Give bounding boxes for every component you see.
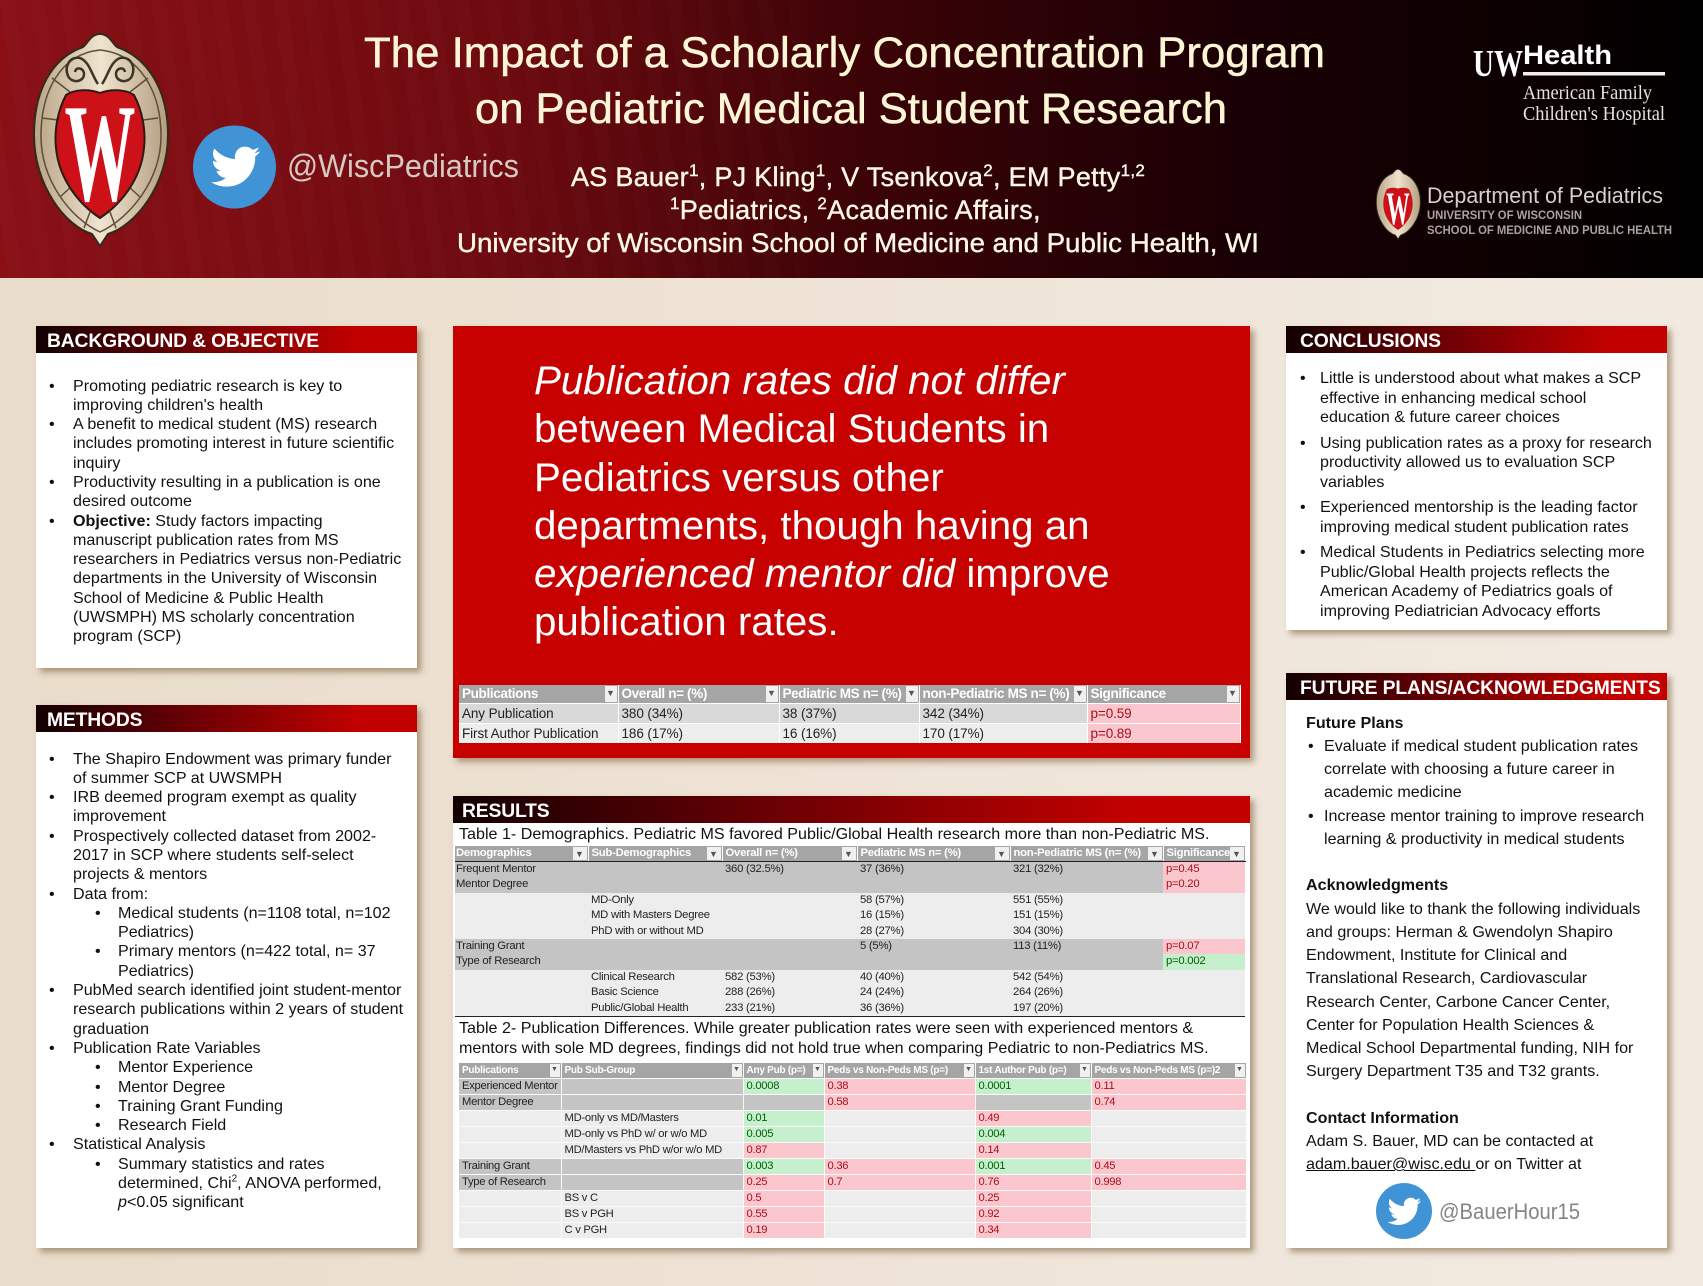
table 2: publication differences: 0.14 (978, 1144, 999, 1156)
heading: results: RESULTS (462, 801, 550, 822)
table 1: demographics: PhD with or without MD (591, 925, 704, 937)
text block: methods bullets: • (95, 1078, 101, 1096)
table 1: demographics: ▼ (709, 849, 718, 859)
key finding statement: between Medical Students in (534, 406, 1049, 451)
table 2: publication differences: 0.74 (1094, 1096, 1115, 1108)
table 1: demographics: 5 (5%) (860, 940, 892, 952)
text block: methods bullets: IRB deemed program exempt as quality (73, 788, 357, 806)
text block: background bullets: • (49, 512, 55, 530)
text block: conclusions bullets: productivity allowed us to evaluation SCP (1320, 453, 1615, 471)
table 2: publication differences: 0.005 (746, 1128, 773, 1140)
table 2: publication differences: 0.87 (746, 1144, 767, 1156)
heading: methods (36, 705, 417, 732)
table 1: demographics: MD-Only (591, 894, 634, 906)
table 1: demographics: 321 (32%) (1013, 863, 1063, 875)
caption: table 2: mentors with sole MD degrees, findings did not hold true when comparing Pediatric to non-Pediatrics MS. (459, 1038, 1209, 1056)
table 2: publication differences: Pub Sub-Group (564, 1065, 635, 1076)
title: The Impact of a Scholarly Concentration Program (364, 29, 1325, 77)
twitter handle: @WiscPediatrics (287, 148, 519, 184)
text block: methods bullets: The Shapiro Endowment was primary funder (73, 750, 391, 768)
heading: background and objective: BACKGROUND & OBJECTIVE (47, 331, 319, 352)
key finding statement: Pediatrics versus other (534, 455, 944, 500)
text block: background bullets: manuscript publication rates from MS (73, 531, 339, 549)
table 1: demographics: 582 (53%) (725, 971, 775, 983)
text block: future plans, acknowledgments, contact: Research Center, Carbone Cancer Center, (1306, 992, 1610, 1010)
heading: future plans and acknowledgments: FUTURE PLANS/ACKNOWLEDGMENTS (1300, 678, 1661, 699)
text block: future plans, acknowledgments, contact: Center for Population Health Sciences & (1306, 1016, 1594, 1034)
table 1: demographics: 58 (57%) (860, 894, 904, 906)
table 1: demographics: 24 (24%) (860, 986, 904, 998)
panel: methods (36, 705, 417, 1248)
key finding statement: publication rates. (534, 599, 839, 644)
table 1: demographics: Type of Research (456, 955, 541, 967)
table 1: demographics: 551 (55%) (1013, 894, 1063, 906)
table 2: publication differences: Peds vs Non-Peds MS (p=)2 (1094, 1065, 1220, 1076)
panel: key finding (453, 326, 1250, 758)
table 2: publication differences: 0.36 (828, 1160, 848, 1172)
table 2: publication differences: 0.7 (828, 1176, 842, 1188)
authors and affiliations: 1 (670, 194, 680, 213)
text block: future plans, acknowledgments, contact: Adam S. Bauer, MD can be contacted at (1306, 1132, 1593, 1150)
logo: UW Health American Family Children's Hospital: American Family (1523, 82, 1652, 104)
table 2: publication differences: ▼ (814, 1066, 821, 1073)
table 2: publication differences: 0.58 (828, 1096, 848, 1108)
table 2: publication differences: 0.01 (746, 1112, 767, 1124)
text block: background bullets: Promoting pediatric research is key to (73, 376, 342, 394)
text block: future plans, acknowledgments, contact (1306, 714, 1644, 1173)
text block: methods bullets: Prospectively collected dataset from 2002- (73, 827, 376, 845)
authors and affiliations: 2 (817, 194, 827, 213)
table 2: publication differences: ▼ (965, 1066, 972, 1073)
header banner (0, 0, 1703, 278)
text block: methods bullets: • (95, 1097, 101, 1115)
table 2: publication differences: 0.001 (978, 1160, 1005, 1172)
table: publication rates summary: ▼ (1075, 688, 1084, 698)
table 2: publication differences: 0.25 (746, 1176, 767, 1188)
panel: background and objective (36, 326, 417, 668)
table 1: demographics: Pediatric MS n= (%) (860, 847, 961, 859)
table 1: demographics: 233 (21%) (725, 1002, 775, 1014)
twitter badge: BauerHour15 (1376, 1183, 1580, 1239)
text block: future plans, acknowledgments, contact: correlate with choosing a future career in (1324, 760, 1615, 778)
table 1: demographics: 16 (15%) (860, 909, 904, 921)
table 2: publication differences: ▼ (1236, 1066, 1243, 1073)
text block: future plans, acknowledgments, contact: Future Plans (1306, 714, 1403, 732)
table 1: demographics: Demographics (456, 847, 531, 859)
table: publication rates summary: Any Publication (462, 706, 554, 720)
logo: university crest (34, 34, 168, 246)
text block: methods bullets: Mentor Experience (118, 1058, 253, 1076)
table: publication rates summary: Pediatric MS n= (%) (782, 686, 902, 700)
table 2: publication differences: MD/Masters vs PhD w/or w/o MD (564, 1144, 722, 1156)
text block: methods bullets: Data from: (73, 885, 148, 903)
text block: future plans, acknowledgments, contact: Evaluate if medical student publication rates (1324, 737, 1638, 755)
table 1: demographics: Significance (1166, 847, 1230, 859)
table 1: demographics: 360 (32.5%) (725, 863, 784, 875)
table 2: publication differences: 0.003 (746, 1160, 773, 1172)
table 1: demographics: non-Pediatric MS (n= (%) (1014, 847, 1141, 859)
text block: methods bullets: • (95, 1155, 101, 1173)
text block: conclusions bullets (1300, 369, 1652, 620)
authors and affiliations: Pediatrics, (680, 195, 817, 225)
table 1: demographics: MD with Masters Degree (591, 909, 710, 921)
table 1: demographics: 288 (26%) (725, 986, 775, 998)
table 1: demographics: ▼ (1150, 849, 1159, 859)
text block: future plans, acknowledgments, contact: • (1308, 737, 1314, 755)
table: publication rates summary: Publications (462, 686, 538, 700)
table 2: publication differences (459, 1063, 1246, 1238)
text block: methods bullets: Pediatrics) (118, 923, 194, 941)
text block: conclusions bullets: education & future career choices (1320, 408, 1560, 426)
heading: conclusions: CONCLUSIONS (1300, 331, 1441, 352)
authors and affiliations: , PJ Kling (699, 162, 816, 192)
table: publication rates summary: Overall n= (%) (622, 686, 707, 700)
text block: background bullets: Objective: Study factors impacting (73, 512, 323, 530)
table 1: demographics: Overall n= (%) (726, 847, 798, 859)
text block: methods bullets (49, 750, 403, 1211)
table 2: publication differences: 0.45 (1094, 1160, 1115, 1172)
authors and affiliations: , V Tsenkova (826, 162, 984, 192)
table 1: demographics: 36 (36%) (860, 1002, 904, 1014)
logo: UW Health American Family Children's Hospital: Health (1523, 40, 1612, 70)
text block: background bullets (49, 376, 401, 645)
authors and affiliations: AS Bauer (571, 162, 689, 192)
logo: Department of Pediatrics: SCHOOL OF MEDICINE AND PUBLIC HEALTH (1427, 225, 1672, 237)
text block: methods bullets: determined, Chi2, ANOVA performed, (118, 1174, 382, 1192)
table 2: publication differences: Training Grant (462, 1160, 530, 1172)
heading: methods: METHODS (47, 710, 142, 731)
text block: background bullets: includes promoting interest in future scientific (73, 434, 394, 452)
logo: Department of Pediatrics (1376, 169, 1672, 239)
table 2: publication differences: BS v PGH (564, 1208, 613, 1220)
table 1: demographics: 197 (20%) (1013, 1002, 1063, 1014)
authors and affiliations: 2 (983, 161, 993, 180)
text block: future plans, acknowledgments, contact: academic medicine (1324, 783, 1462, 801)
text block: methods bullets: • (49, 750, 55, 768)
text block: background bullets: (UWSMPH) MS scholarly concentration (73, 608, 355, 626)
text block: methods bullets: • (49, 1039, 55, 1057)
table: publication rates summary: 186 (17%) (622, 726, 683, 740)
logo: university crest: W (64, 76, 136, 231)
text block: methods bullets: Publication Rate Variables (73, 1039, 261, 1057)
text block: future plans, acknowledgments, contact: • (1308, 806, 1314, 824)
text block: methods bullets: • (95, 942, 101, 960)
text block: methods bullets: • (49, 981, 55, 999)
text block: future plans, acknowledgments, contact: and groups: Herman & Gwendolyn Shapiro (1306, 923, 1613, 941)
table 1: demographics: 37 (36%) (860, 863, 904, 875)
text block: background bullets: inquiry (73, 454, 120, 472)
text block: future plans, acknowledgments, contact: Increase mentor training to improve research (1324, 806, 1644, 824)
heading: conclusions (1286, 326, 1667, 353)
text block: background bullets: School of Medicine & Public Health (73, 589, 323, 607)
text block: background bullets: researchers in Pediatrics versus non-Pediatric (73, 550, 401, 568)
table: publication rates summary: 380 (34%) (622, 706, 683, 720)
text block: conclusions bullets: improving medical student publication rates (1320, 518, 1629, 536)
text block: conclusions bullets: • (1300, 498, 1306, 516)
table 1: demographics: 40 (40%) (860, 971, 904, 983)
text block: background bullets: • (49, 376, 55, 394)
table 2: publication differences: 0.76 (978, 1176, 999, 1188)
table 2: publication differences: ▼ (551, 1066, 558, 1073)
heading: background and objective (36, 326, 417, 353)
table: publication rates summary: ▼ (907, 688, 916, 698)
text block: conclusions bullets: • (1300, 434, 1306, 452)
table 1: demographics (455, 846, 1246, 1017)
logo: Department of Pediatrics: Department of Pediatrics (1427, 183, 1663, 208)
text block: future plans, acknowledgments, contact: Medical School Departmental funding, NIH for (1306, 1039, 1633, 1057)
table 1: demographics: ▼ (844, 849, 853, 859)
text block: methods bullets: PubMed search identified joint student-mentor (73, 981, 401, 999)
title: on Pediatric Medical Student Research (475, 85, 1227, 133)
text block: conclusions bullets: Experienced mentorship is the leading factor (1320, 498, 1638, 516)
twitter badge: BauerHour15: @BauerHour15 (1439, 1199, 1580, 1224)
table 2: publication differences: 0.0008 (746, 1080, 779, 1092)
table 2: publication differences: Type of Research (462, 1176, 546, 1188)
title (364, 29, 1325, 133)
table 2: publication differences: BS v C (564, 1192, 598, 1204)
table 1: demographics: ▼ (997, 849, 1006, 859)
text block: methods bullets: Summary statistics and rates (118, 1155, 325, 1173)
table 2: publication differences: C v PGH (564, 1224, 607, 1236)
text block: background bullets: Productivity resulting in a publication is one (73, 473, 381, 491)
table: publication rates summary: p=0.89 (1090, 726, 1132, 740)
table: publication rates summary (459, 685, 1241, 743)
table 1: demographics: 264 (26%) (1013, 986, 1063, 998)
table 2: publication differences: Mentor Degree (462, 1096, 533, 1108)
table 1: demographics: Clinical Research (591, 971, 675, 983)
table 1: demographics: p=0.20 (1166, 878, 1199, 890)
key finding statement: experienced mentor did improve (534, 551, 1110, 596)
text block: methods bullets: • (49, 827, 55, 845)
table 2: publication differences: Publications (462, 1065, 518, 1076)
caption: table 1: Table 1- Demographics. Pediatric MS favored Public/Global Health research more than non-Pediatric MS. (459, 825, 1210, 843)
text block: background bullets: A benefit to medical student (MS) research (73, 415, 377, 433)
table 2: publication differences: Peds vs Non-Peds MS (p=) (828, 1065, 948, 1076)
table 2: publication differences: 0.5 (746, 1192, 761, 1204)
table 1: demographics: Mentor Degree (456, 878, 528, 890)
text block: conclusions bullets: • (1300, 543, 1306, 561)
text block: future plans, acknowledgments, contact: Surgery Department T35 and T32 grants. (1306, 1062, 1600, 1080)
text block: conclusions bullets: improving Pediatrician Advocacy efforts (1320, 602, 1601, 620)
text block: methods bullets: • (49, 1135, 55, 1153)
table 1: demographics: 28 (27%) (860, 925, 904, 937)
table 1: demographics: Public/Global Health (591, 1002, 688, 1014)
table: publication rates summary: First Author Publication (462, 726, 598, 740)
authors and affiliations: , EM Petty (993, 162, 1121, 192)
heading: results (453, 796, 1250, 823)
text block: conclusions bullets: • (1300, 369, 1306, 387)
logo: UW Health American Family Children's Hospital: UW (1473, 43, 1523, 85)
text block: future plans, acknowledgments, contact: Endowment, Institute for Clinical and (1306, 946, 1567, 964)
table 2: publication differences: 0.92 (978, 1208, 999, 1220)
table 2: publication differences: 0.55 (746, 1208, 767, 1220)
text block: background bullets: • (49, 473, 55, 491)
authors and affiliations: 1,2 (1121, 161, 1145, 180)
table: publication rates summary: non-Pediatric MS n= (%) (922, 686, 1069, 700)
table 2: publication differences: 0.19 (746, 1224, 767, 1236)
table 2: publication differences: MD-only vs PhD w/ or w/o MD (564, 1128, 707, 1140)
text block: future plans, acknowledgments, contact: adam.bauer@wisc.edu or on Twitter at (1306, 1155, 1581, 1173)
table 2: publication differences: 0.11 (1094, 1080, 1114, 1092)
text block: methods bullets: • (95, 1058, 101, 1076)
logo: Department of Pediatrics: UNIVERSITY OF WISCONSIN (1427, 210, 1582, 222)
text block: background bullets: improving children's health (73, 396, 263, 414)
table 2: publication differences: ▼ (733, 1066, 740, 1073)
table 1: demographics: Training Grant (456, 940, 524, 952)
table: publication rates summary: 342 (34%) (922, 706, 984, 720)
table: publication rates summary: ▼ (767, 688, 776, 698)
text block: future plans, acknowledgments, contact: Translational Research, Cardiovascular (1306, 969, 1587, 987)
key finding statement (534, 358, 1110, 644)
authors and affiliations: 1 (689, 161, 699, 180)
table: publication rates summary: 16 (16%) (782, 726, 836, 740)
table 2: publication differences: 0.004 (978, 1128, 1005, 1140)
text block: methods bullets: research publications within 2 years of student (73, 1000, 403, 1018)
text block: methods bullets: p<0.05 significant (118, 1193, 244, 1211)
table 1: demographics: p=0.07 (1166, 940, 1199, 952)
table 1: demographics: Frequent Mentor (456, 863, 536, 875)
table 1: demographics: p=0.002 (1166, 955, 1205, 967)
text block: methods bullets: • (49, 885, 55, 903)
text block: methods bullets: Research Field (118, 1116, 226, 1134)
text block: methods bullets: Statistical Analysis (73, 1135, 205, 1153)
caption: table 2 (459, 1019, 1209, 1056)
text block: conclusions bullets: Public/Global Health projects reflects the (1320, 562, 1610, 580)
key finding statement: Publication rates did not differ (534, 358, 1065, 403)
logo: UW Health American Family Children's Hospital: Children's Hospital (1523, 103, 1665, 125)
text block: methods bullets: Mentor Degree (118, 1078, 225, 1096)
table 1: demographics: 113 (11%) (1013, 940, 1061, 952)
authors and affiliations: 1 (816, 161, 826, 180)
panel: future plans and acknowledgments (1286, 673, 1667, 1248)
table: publication rates summary: ▼ (1228, 688, 1237, 698)
table 2: publication differences: 0.49 (978, 1112, 999, 1124)
authors and affiliations: University of Wisconsin School of Medicine and Public Health, WI (457, 228, 1259, 258)
text block: future plans, acknowledgments, contact: Contact Information (1306, 1109, 1459, 1127)
table: publication rates summary: Significance (1090, 686, 1166, 700)
text block: conclusions bullets: effective in enhancing medical school (1320, 388, 1586, 406)
text block: future plans, acknowledgments, contact: learning & productivity in medical students (1324, 830, 1625, 848)
table 1: demographics: 151 (15%) (1013, 909, 1063, 921)
text block: methods bullets: Pediatrics) (118, 962, 194, 980)
text block: methods bullets: 2017 in SCP where students self-select (73, 846, 354, 864)
key finding statement: departments, though having an (534, 503, 1090, 548)
table 2: publication differences: MD-only vs MD/Masters (564, 1112, 679, 1124)
text block: methods bullets: graduation (73, 1020, 149, 1038)
panel: conclusions (1286, 326, 1667, 630)
text block: conclusions bullets: Using publication rates as a proxy for research (1320, 434, 1652, 452)
table: publication rates summary: 170 (17%) (922, 726, 984, 740)
table 1: demographics: ▼ (575, 849, 584, 859)
icon: twitter bird badge (193, 126, 276, 208)
table: publication rates summary: p=0.59 (1090, 706, 1132, 720)
authors and affiliations (457, 161, 1259, 258)
text block: methods bullets: Primary mentors (n=422 total, n= 37 (118, 942, 376, 960)
text block: methods bullets: • (95, 1116, 101, 1134)
text block: methods bullets: projects & mentors (73, 865, 207, 883)
table 2: publication differences: 0.998 (1094, 1176, 1121, 1188)
table 2: publication differences: 0.0001 (978, 1080, 1011, 1092)
table 2: publication differences: 1st Author Pub (p=) (978, 1065, 1066, 1076)
table 1: demographics: 304 (30%) (1013, 925, 1063, 937)
table: publication rates summary: 38 (37%) (782, 706, 836, 720)
text block: future plans, acknowledgments, contact: Acknowledgments (1306, 876, 1448, 894)
table 2: publication differences: ▼ (1081, 1066, 1088, 1073)
table 2: publication differences: Any Pub (p=) (746, 1065, 805, 1076)
text block: methods bullets: Training Grant Funding (118, 1097, 283, 1115)
text block: conclusions bullets: Little is understood about what makes a SCP (1320, 369, 1641, 387)
table 1: demographics: ▼ (1232, 849, 1241, 859)
logo: Department of Pediatrics: W (1386, 183, 1410, 234)
text block: methods bullets: Medical students (n=1108 total, n=102 (118, 904, 391, 922)
logo: UW Health American Family Children's Hospital (1473, 40, 1665, 125)
table 2: publication differences: 0.38 (828, 1080, 848, 1092)
text block: methods bullets: improvement (73, 807, 166, 825)
table 1: demographics: Basic Science (591, 986, 659, 998)
panel: results (453, 796, 1250, 1248)
text block: background bullets: • (49, 415, 55, 433)
table 2: publication differences: 0.25 (978, 1192, 999, 1204)
caption: table 2: Table 2- Publication Differences. While greater publication rates were seen with experienced mentors & (459, 1019, 1193, 1037)
text block: background bullets: desired outcome (73, 492, 192, 510)
text block: conclusions bullets: American Academy of Pediatrics goals of (1320, 582, 1613, 600)
text block: conclusions bullets: Medical Students in Pediatrics selecting more (1320, 543, 1645, 561)
text block: conclusions bullets: variables (1320, 472, 1384, 490)
text block: future plans, acknowledgments, contact: We would like to thank the following individuals (1306, 900, 1640, 918)
authors and affiliations: Academic Affairs, (827, 195, 1041, 225)
table 1: demographics: 542 (54%) (1013, 971, 1063, 983)
table 2: publication differences: Experienced Mentor (462, 1080, 558, 1092)
table 2: publication differences: 0.34 (978, 1224, 999, 1236)
text block: methods bullets: • (49, 788, 55, 806)
text block: methods bullets: of summer SCP at UWSMPH (73, 769, 282, 787)
table: publication rates summary: ▼ (606, 688, 615, 698)
text block: methods bullets: • (95, 904, 101, 922)
table 1: demographics: p=0.45 (1166, 863, 1199, 875)
text block: background bullets: program (SCP) (73, 627, 181, 645)
text block: background bullets: departments in the University of Wisconsin (73, 569, 377, 587)
table 1: demographics: Sub-Demographics (592, 847, 691, 859)
